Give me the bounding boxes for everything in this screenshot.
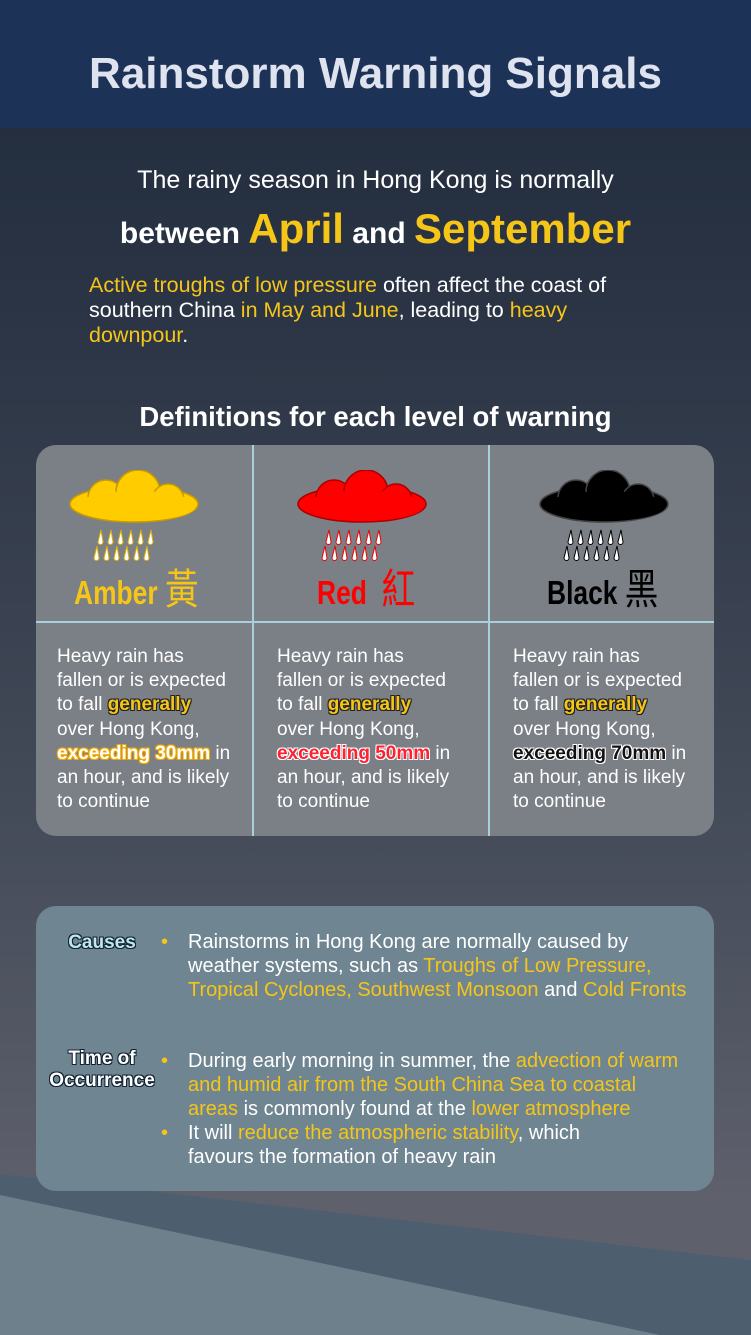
label: amber: Amber 黃 (74, 566, 199, 613)
text: red definition (276, 646, 450, 812)
text: red definition: exceeding 50mm in (277, 743, 450, 764)
text: amber definition: exceeding 30mm in (57, 743, 230, 764)
text: causes: weather systems, such as Troughs of Low Pressure, (188, 955, 652, 977)
text: black definition: fallen or is expected (513, 670, 682, 691)
text: amber definition: fallen or is expected (57, 670, 226, 691)
text: amber definition: over Hong Kong, (57, 719, 200, 740)
text: time of occurrence: and humid air from the South China Sea to coastal (188, 1074, 636, 1096)
definitions heading: Definitions for each level of warning (139, 401, 612, 432)
icon: amber cloud (69, 470, 199, 561)
intro months: between April and September (120, 205, 631, 252)
label: black: Black 黑 (547, 566, 658, 613)
text: causes: Rainstorms in Hong Kong are normally caused by (188, 931, 628, 953)
text: red definition: over Hong Kong, (277, 719, 420, 740)
text: amber definition: to continue (57, 791, 150, 812)
text: time of occurrence (161, 1050, 678, 1168)
intro line: The rainy season in Hong Kong is normally (137, 166, 614, 194)
intro paragraph: downpour. (89, 323, 188, 347)
text: time of occurrence: areas is commonly found at the lower atmosphere (188, 1098, 630, 1120)
text: black definition: over Hong Kong, (513, 719, 656, 740)
intro paragraph (89, 273, 606, 347)
panel: causes and time: • (161, 1122, 168, 1144)
intro paragraph: southern China in May and June, leading to heavy (89, 298, 567, 322)
label: time of occurrence: Occurrence (49, 1070, 155, 1091)
text: black definition: Heavy rain has (513, 646, 640, 667)
intro paragraph: Active troughs of low pressure often affect the coast of (89, 273, 606, 297)
panel: warning levels (36, 445, 714, 836)
text: black definition (512, 646, 686, 812)
title: Rainstorm Warning Signals (89, 49, 662, 98)
text: red definition: an hour, and is likely (277, 767, 449, 788)
label: causes: Causes (68, 932, 136, 953)
label: time of occurrence: Time of (68, 1048, 136, 1069)
header band (0, 0, 751, 128)
icon: black cloud (539, 470, 669, 561)
text: amber definition (56, 646, 230, 812)
text: time of occurrence: favours the formation of heavy rain (188, 1146, 496, 1168)
text: red definition: to fall generally (277, 694, 411, 715)
icon: red cloud (297, 470, 427, 561)
label: time of occurrence (49, 1048, 156, 1091)
text: black definition: to continue (513, 791, 606, 812)
text: black definition: to fall generally (513, 694, 647, 715)
text: black definition: exceeding 70mm in (513, 743, 686, 764)
text: black definition: an hour, and is likely (513, 767, 685, 788)
panel: causes and time: • (161, 1050, 168, 1072)
panel: causes and time: • (161, 931, 168, 953)
panel: causes and time (36, 906, 714, 1191)
text: red definition: Heavy rain has (277, 646, 404, 667)
text: amber definition: to fall generally (57, 694, 191, 715)
text: amber definition: an hour, and is likely (57, 767, 229, 788)
text: red definition: to continue (277, 791, 370, 812)
text: amber definition: Heavy rain has (57, 646, 184, 667)
label: red: Red 紅 (317, 566, 415, 613)
text: red definition: fallen or is expected (277, 670, 446, 691)
text: causes (161, 931, 686, 1001)
text: time of occurrence: During early morning in summer, the advection of warm (188, 1050, 678, 1072)
text: time of occurrence: It will reduce the atmospheric stability, which (188, 1122, 580, 1144)
text: causes: Tropical Cyclones, Southwest Monsoon and Cold Fronts (188, 979, 686, 1001)
